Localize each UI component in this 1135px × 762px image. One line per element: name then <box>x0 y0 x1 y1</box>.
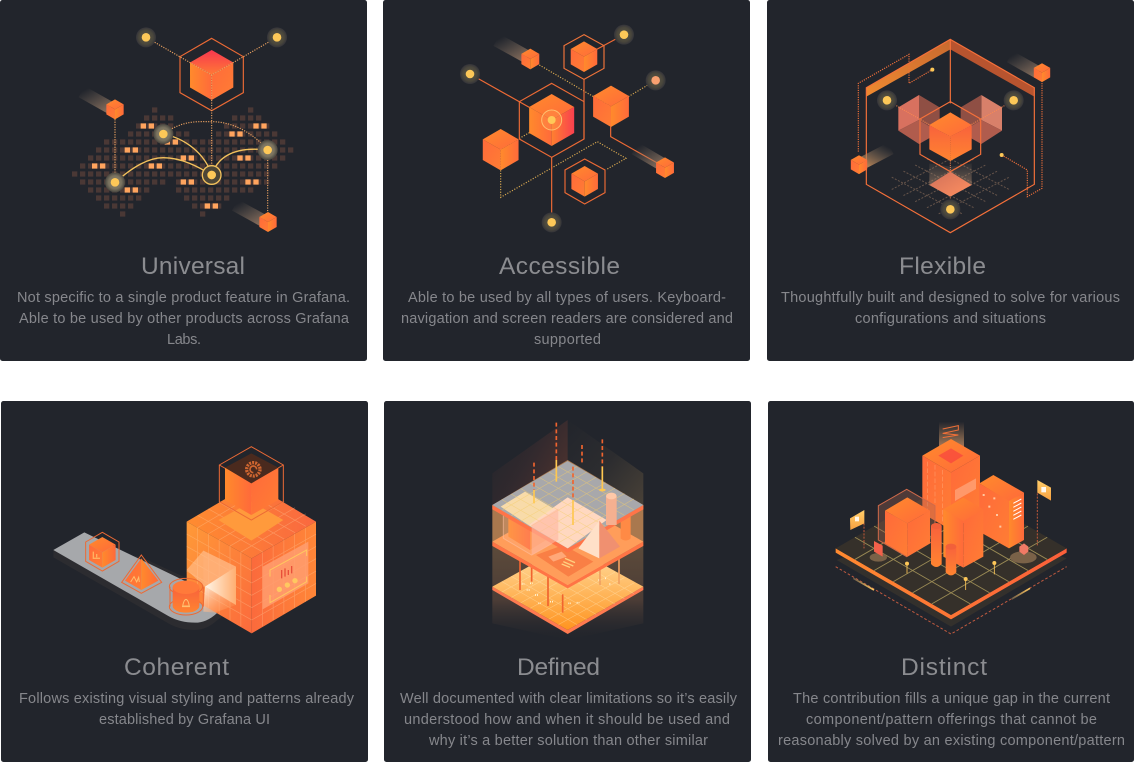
pyramid on belt <box>122 555 162 593</box>
rear cylinder <box>621 515 631 540</box>
pole: tall <box>554 423 559 482</box>
top plate <box>492 461 643 548</box>
floor grid <box>880 147 1021 220</box>
description: understood how and when it should be used and <box>404 712 730 728</box>
glow between floors <box>492 460 643 585</box>
pole: far left <box>531 463 536 503</box>
pin nodes <box>905 561 996 590</box>
right block <box>979 475 1024 548</box>
panel: Defined <box>384 401 751 762</box>
tag right <box>1019 543 1028 555</box>
node: bottom <box>940 199 960 219</box>
description <box>19 691 355 728</box>
grid lines: left <box>187 522 252 632</box>
dotted connectors <box>115 37 277 213</box>
flag left <box>850 510 864 548</box>
cylinder with bell <box>169 578 203 615</box>
heading: Distinct <box>901 654 987 681</box>
middle plate <box>492 498 643 585</box>
panel: Coherent <box>1 401 368 762</box>
pole: centre <box>570 467 575 525</box>
dotted node connectors <box>887 100 1014 209</box>
description: why it’s a better solution than other similar <box>428 733 708 749</box>
trail: right cube <box>635 148 662 164</box>
floor shadows <box>870 551 1037 563</box>
highlighted map dots <box>92 126 267 206</box>
stack icon <box>943 426 958 438</box>
main cube <box>190 50 233 100</box>
cylinder short <box>946 544 956 575</box>
translucent right cube <box>961 95 1002 144</box>
small cube: left <box>851 155 867 174</box>
description: Able to be used by other products across Grafana <box>19 311 350 327</box>
front block <box>943 498 983 568</box>
support pillars <box>520 560 563 613</box>
pole: short <box>579 445 584 463</box>
node: bottom <box>542 212 562 232</box>
tall building <box>922 439 980 530</box>
cube: left <box>483 129 519 170</box>
bottom plate <box>492 545 643 630</box>
description: component/pattern offerings that cannot be <box>806 712 1097 728</box>
panel: Distinct <box>768 401 1134 762</box>
logo cube wireframe <box>219 447 283 520</box>
description: Thoughtfully built and designed to solve for various <box>781 290 1120 306</box>
conveyor shadow <box>53 550 227 630</box>
illustration: connected hexagons and cubes <box>460 25 674 232</box>
description: configurations and situations <box>855 311 1046 327</box>
glass panel over top plate <box>532 508 558 555</box>
card background <box>767 0 1134 361</box>
central hexagon <box>519 83 584 157</box>
accent dash right <box>1012 588 1030 599</box>
grid lines: top <box>187 483 317 558</box>
heading: Flexible <box>899 253 986 280</box>
logo cube right side <box>251 468 278 515</box>
central cube <box>529 94 574 146</box>
cube: right <box>593 86 629 127</box>
node: top right <box>614 25 634 45</box>
small cube: lower <box>259 212 277 232</box>
small cube: top <box>521 49 539 69</box>
upper hexagon <box>564 35 604 79</box>
small cube: right <box>656 157 674 178</box>
dashed outline <box>836 567 1067 634</box>
description <box>17 290 350 348</box>
node: right <box>646 70 666 90</box>
node: top left <box>136 27 156 47</box>
small cube on belt <box>86 532 119 571</box>
data scatter <box>522 578 611 603</box>
tag left <box>874 541 883 557</box>
logo cube dark top <box>225 453 278 483</box>
plate top <box>836 482 1067 615</box>
card background <box>383 0 750 361</box>
illustration: network hub over map <box>82 27 287 232</box>
illustration: wireframe with cubes <box>851 39 1050 233</box>
factory cube top <box>187 483 316 558</box>
dotted connectors <box>501 65 656 197</box>
ID card <box>536 545 593 577</box>
small cube: top right <box>1034 63 1050 82</box>
plate grid <box>836 482 1066 615</box>
stack icon beam <box>939 422 964 458</box>
description: supported <box>534 332 601 348</box>
description: navigation and screen readers are considered and <box>401 311 733 327</box>
bottom plate edge <box>492 587 643 634</box>
top band left <box>866 39 950 97</box>
centre cube <box>929 112 972 161</box>
logo cube left side <box>225 468 251 515</box>
trail: top cube <box>497 40 527 57</box>
node: map left <box>105 172 125 192</box>
bottom plate grid <box>492 545 643 630</box>
description: Not specific to a single product feature in Grafana. <box>17 290 350 306</box>
node: right <box>1004 90 1024 110</box>
hexagon outline <box>180 38 243 111</box>
top plate edge <box>492 505 643 553</box>
glass box <box>503 492 558 555</box>
node: map upper <box>153 124 173 144</box>
description: The contribution fills a unique gap in the current <box>793 691 1110 707</box>
top plate pale floor <box>528 497 607 548</box>
pole: right <box>599 439 606 491</box>
node: left <box>460 64 480 84</box>
heading: Defined <box>517 654 600 681</box>
trail: upper cube <box>82 92 110 108</box>
left dotted route <box>858 54 932 152</box>
description: Well documented with clear limitations so it’s easily <box>400 691 738 707</box>
support pillars right <box>600 559 619 585</box>
heading: Universal <box>141 253 245 280</box>
front cylinder <box>606 493 617 525</box>
illustration: layered floors <box>492 420 643 640</box>
illustration: isometric city <box>836 422 1067 634</box>
card background <box>1 401 368 762</box>
factory cube left face <box>187 522 252 633</box>
heading: Coherent <box>124 654 229 681</box>
small cube: upper <box>106 99 124 119</box>
node: map right <box>258 140 278 160</box>
trail: top right cube <box>1010 57 1038 73</box>
panel: Flexible <box>767 0 1134 361</box>
plate edge <box>836 548 1067 619</box>
right dotted route <box>1002 82 1042 197</box>
panel: Accessible <box>383 0 750 361</box>
node: top right <box>267 27 287 47</box>
wireframe hexagon <box>866 39 1034 233</box>
pyramid <box>578 521 620 558</box>
translucent left cube <box>898 95 940 144</box>
description <box>401 290 733 348</box>
description: Able to be used by all types of users. Keyboard- <box>408 290 726 306</box>
upper right glow <box>568 420 643 510</box>
lower hexagon <box>565 159 605 204</box>
card background <box>384 401 751 762</box>
description: Labs. <box>167 332 201 348</box>
solid connectors <box>470 35 657 213</box>
description <box>781 290 1120 327</box>
icon: Grafana logo <box>247 463 260 476</box>
dot-grid world map <box>72 110 293 214</box>
lower cube <box>571 166 598 197</box>
upper left glow <box>492 420 568 510</box>
description <box>400 691 738 749</box>
illustration: conveyor and factory cube <box>53 447 317 633</box>
description: reasonably solved by an existing component/pattern <box>778 733 1125 749</box>
cylinder tall <box>931 523 942 567</box>
trail: left cube <box>863 148 891 163</box>
accent dash left <box>853 578 874 590</box>
grid lines: right <box>252 522 316 632</box>
factory cube right face <box>252 522 316 633</box>
flag right <box>1037 480 1051 546</box>
plate shadow <box>837 515 1067 627</box>
card background <box>0 0 367 361</box>
node: centre ring <box>202 166 221 184</box>
window light <box>187 551 236 613</box>
centre hexagon <box>920 102 981 172</box>
dotted arch <box>163 122 268 150</box>
description: established by Grafana UI <box>99 712 270 728</box>
glass cube <box>878 489 935 557</box>
top reflection <box>218 502 283 541</box>
top plate grid <box>492 461 643 548</box>
node: left <box>877 90 897 110</box>
panel: Universal <box>0 0 367 361</box>
ghost cube below <box>929 163 972 197</box>
upper cube <box>571 41 597 72</box>
description: Follows existing visual styling and patterns already <box>19 691 355 707</box>
heading: Accessible <box>499 253 620 280</box>
lower glow <box>492 540 643 640</box>
description <box>778 691 1125 749</box>
central target node <box>542 110 562 130</box>
top band right <box>950 39 1034 97</box>
conveyor belt <box>53 532 227 623</box>
endpoint dots <box>930 68 1004 157</box>
trail: lower cube <box>235 205 263 221</box>
top plate left pale floor <box>501 492 553 525</box>
middle plate edge <box>492 542 643 588</box>
yellow arcs <box>115 134 268 182</box>
card background <box>768 401 1134 762</box>
dashboard panel on cube <box>263 542 308 609</box>
